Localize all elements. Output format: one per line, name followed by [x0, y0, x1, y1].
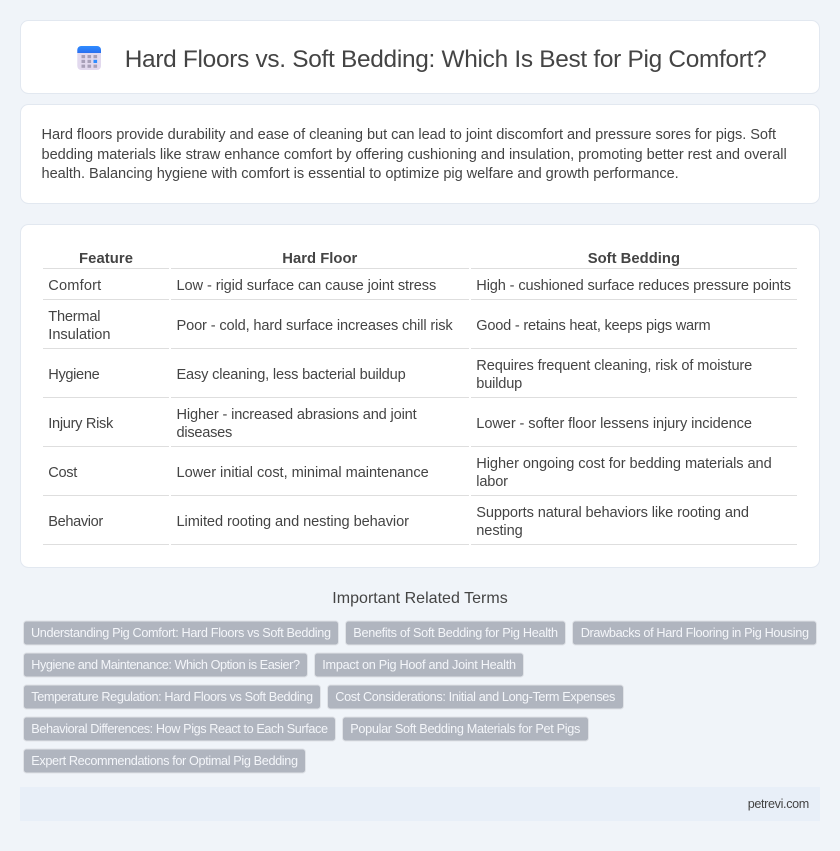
table row: behavior: Limited rooting and nesting behavior [176, 514, 409, 530]
tag: Temperature Regulation: Hard Floors vs Soft Bedding [31, 690, 313, 704]
tag [24, 685, 320, 709]
tag [24, 717, 336, 741]
text block: introduction paragraph: bedding materials like straw enhance comfort by offering cushioning and insulation, promoting better rest and overall [42, 147, 787, 163]
table header row: Soft Bedding [588, 251, 680, 267]
table row: thermal insulation: Good - retains heat, keeps pigs warm [476, 318, 711, 334]
panel: comparison table [20, 224, 820, 568]
tag: Cost Considerations: Initial and Long-Term Expenses [335, 690, 615, 704]
tag: Popular Soft Bedding Materials for Pet Pigs [350, 722, 580, 736]
table row: injury risk [48, 407, 752, 441]
tag [328, 685, 624, 709]
table row: cost [48, 456, 772, 490]
heading: important related terms: Important Related Terms [332, 590, 508, 607]
table row: thermal insulation: Insulation [48, 327, 110, 343]
table row: behavior: Supports natural behaviors like rooting and [476, 505, 749, 521]
table header row [79, 251, 680, 267]
panel: title header [20, 20, 820, 94]
table row: behavior: nesting [476, 523, 523, 539]
tag: Impact on Pig Hoof and Joint Health [322, 658, 516, 672]
footer: petrevi.com [748, 797, 809, 811]
text block: introduction paragraph: health. Balancing hygiene with comfort is essential to optimize pig welfare and growth performance. [42, 166, 679, 182]
tag: Hygiene and Maintenance: Which Option is Easier? [31, 658, 300, 672]
icon: calendar [77, 46, 101, 70]
panel: related term tags [24, 621, 816, 773]
table row: cost: labor [476, 474, 508, 490]
title: Hard Floors vs. Soft Bedding: Which Is Best for Pig Comfort? [125, 46, 767, 73]
table row: injury risk: Higher - increased abrasions and joint [176, 407, 417, 423]
table row: injury risk: Injury Risk [48, 416, 114, 432]
tag [24, 653, 308, 677]
table row: injury risk: Lower - softer floor lessens injury incidence [476, 416, 752, 432]
text block: introduction paragraph [42, 127, 787, 182]
footer [20, 787, 820, 821]
tag [24, 621, 338, 645]
table row: comfort: High - cushioned surface reduces pressure points [476, 278, 791, 294]
table row: hygiene: Hygiene [48, 367, 100, 383]
tag: Expert Recommendations for Optimal Pig Bedding [31, 754, 298, 768]
table row: injury risk: diseases [176, 425, 232, 441]
table row: hygiene: Easy cleaning, less bacterial buildup [176, 367, 406, 383]
table row: comfort: Low - rigid surface can cause joint stress [176, 278, 436, 294]
tag [24, 749, 306, 773]
tag [572, 621, 816, 645]
table row: thermal insulation: Thermal [48, 309, 100, 325]
table row: behavior: Behavior [48, 514, 103, 530]
tag: Drawbacks of Hard Flooring in Pig Housing [581, 626, 809, 640]
table row: comfort [48, 278, 791, 294]
table row: cost: Higher ongoing cost for bedding materials and [476, 456, 772, 472]
table row: comfort: Comfort [48, 278, 101, 294]
table row: cost: Cost [48, 465, 77, 481]
panel: introduction [20, 104, 820, 204]
table header row: Hard Floor [282, 251, 358, 267]
table row: cost: Lower initial cost, minimal maintenance [176, 465, 429, 481]
tag [314, 653, 524, 677]
table row: thermal insulation [48, 309, 711, 343]
table row: hygiene [48, 358, 752, 392]
table row: hygiene: Requires frequent cleaning, risk of moisture [476, 358, 752, 374]
tag: Benefits of Soft Bedding for Pig Health [353, 626, 558, 640]
text block: introduction paragraph: Hard floors provide durability and ease of cleaning but can lead to joint discomfort and pressure sores for pigs. Soft [42, 127, 776, 143]
table row: thermal insulation: Poor - cold, hard surface increases chill risk [176, 318, 453, 334]
table row: behavior [48, 505, 749, 539]
tag: Behavioral Differences: How Pigs React to Each Surface [31, 722, 328, 736]
tag [342, 717, 588, 741]
table row: hygiene: buildup [476, 376, 522, 392]
table header row: Feature [79, 251, 133, 267]
tag: Understanding Pig Comfort: Hard Floors vs Soft Bedding [31, 626, 331, 640]
tag [346, 621, 566, 645]
